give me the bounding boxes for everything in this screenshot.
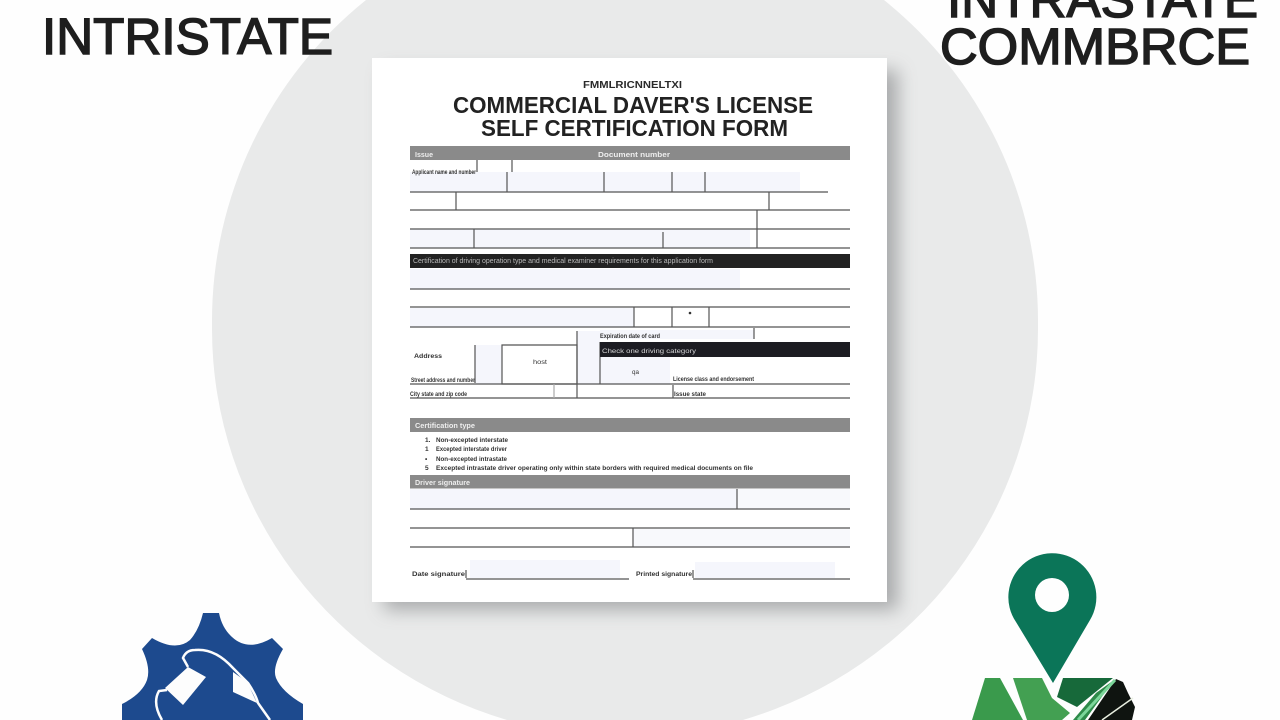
form title: SELF CERTIFICATION FORM [481, 115, 788, 141]
middle field labels: Issue state [674, 391, 706, 398]
dark notice bar [600, 342, 850, 357]
form grid: upper fields [410, 160, 850, 339]
certification list: • [425, 456, 428, 463]
heading: intristate: INTRISTATE [42, 8, 333, 65]
section bar: header: Issue [415, 150, 433, 159]
icon: map with hand [972, 678, 1135, 720]
panel: certification form [372, 58, 887, 602]
certification list: 1 [425, 446, 429, 453]
middle field labels: Street address and number [411, 377, 475, 384]
form title [453, 92, 813, 141]
form page shadow [384, 70, 898, 610]
dark notice bar: Check one driving category [602, 348, 697, 355]
middle field labels: qa [632, 369, 639, 376]
form grid: lower fields [410, 489, 850, 579]
certification list: 1. [425, 437, 431, 444]
section bar: header [410, 146, 850, 160]
certification list: Non-excepted intrastate [436, 456, 507, 463]
middle field labels [410, 333, 755, 398]
middle field labels: License class and endorsement [673, 376, 755, 383]
dot mark [689, 312, 691, 314]
dark instruction bar [410, 254, 850, 268]
section bar: signature: Driver signature [415, 480, 470, 487]
small field label: Applicant name and number [412, 170, 477, 176]
section bar: header: Document number [598, 150, 670, 159]
certification list: Excepted intrastate driver operating only within state borders with required medical documents on file [436, 465, 753, 472]
middle field labels: Expiration date of card [600, 333, 660, 340]
form field tints [410, 172, 850, 578]
signature labels: Date signature [412, 571, 465, 578]
signature labels: Printed signature [636, 571, 692, 578]
certification list: Non-excepted interstate [436, 437, 508, 444]
form title: COMMERCIAL DAVER'S LICENSE [453, 92, 813, 118]
section bar: certification: Certification type [415, 423, 475, 430]
icon: gear with wrench [122, 613, 303, 720]
section bar: signature [410, 475, 850, 488]
section bar: certification [410, 418, 850, 432]
signature labels [412, 571, 692, 578]
certification list: Excepted interstate driver [436, 446, 507, 453]
background circle [212, 0, 1038, 720]
form subtitle: FMMLRICNNELTXI [583, 79, 682, 91]
middle field labels: host [533, 359, 547, 366]
middle field labels: Address [414, 353, 442, 360]
certification list [425, 437, 753, 472]
middle field labels: City state and zip code [410, 391, 467, 398]
certification list: 5 [425, 465, 429, 472]
dark instruction bar: Certification of driving operation type and medical examiner requirements for this application form [413, 258, 713, 265]
form grid: middle fields [410, 331, 850, 398]
icon: location pin [1008, 553, 1096, 683]
heading: intrastate commerce: COMMBRCE [940, 18, 1250, 75]
